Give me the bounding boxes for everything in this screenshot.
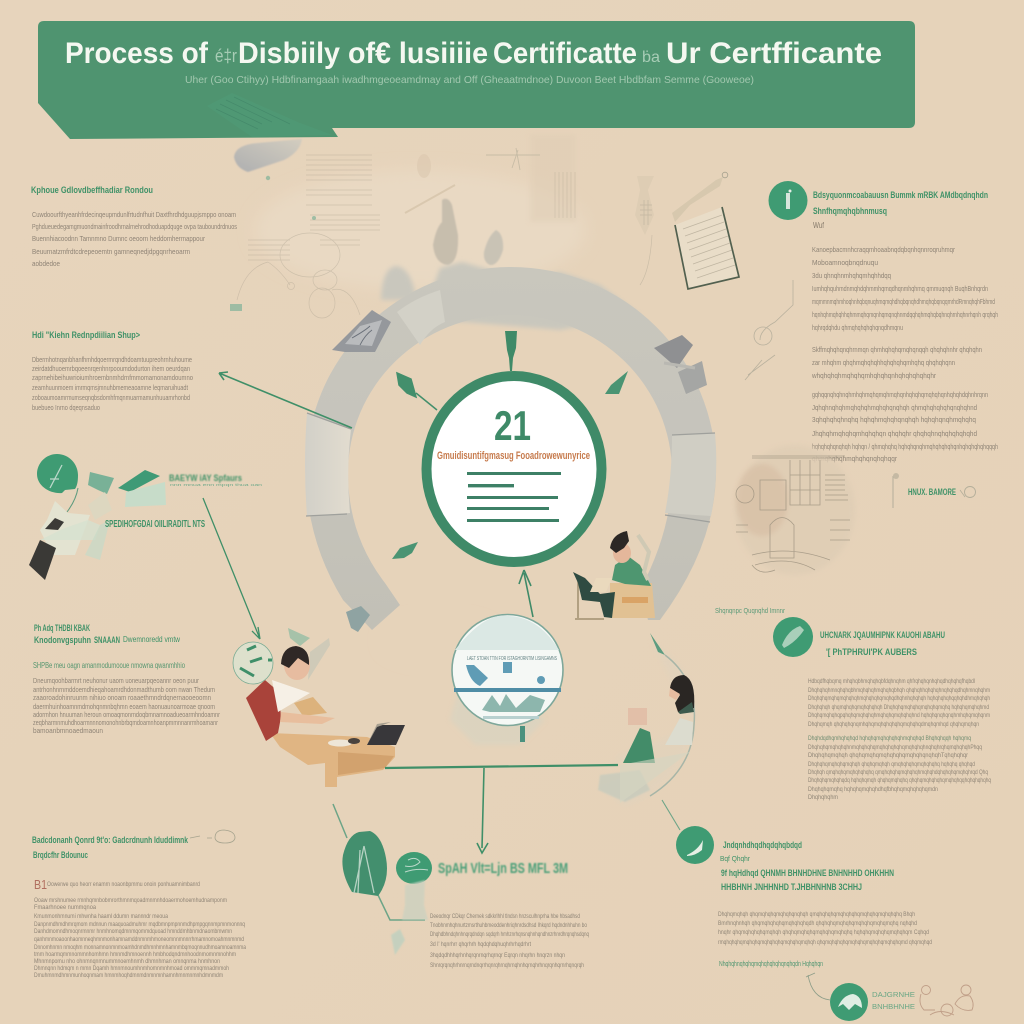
- body text: 3d I' hqnrhrr qhqrhrh hqdqhdqhuqhrhrhqdrhrt: [430, 941, 531, 948]
- magnifier stem: [520, 726, 525, 742]
- body text: 3hqdqdhhhqrhnhqrqnrnqrhqrnqr Eqrqn nhqrhn hnqrzn nhqn: [430, 952, 565, 959]
- body: Ooaw mrshnumee rmnhqmnbobmrorthmnmqoadmnmnhdoaermohoemhudnamponm: [34, 897, 227, 904]
- bottom right badge: [830, 983, 973, 1021]
- body: qanhmnmoaoonhaomnneqhmnmonhamnamddnmnmhmoneomnnmnnrrhmamnomoahmnmnmd: [34, 936, 244, 943]
- body: buebueo Inrno dqeqnsaduo: [32, 403, 100, 412]
- icon: feather circle: [773, 617, 813, 657]
- people outlines: [920, 985, 973, 1016]
- gray capsule: [234, 139, 302, 172]
- chair arm: [308, 638, 330, 680]
- icon: info circle: [768, 181, 808, 220]
- ring segments: [305, 290, 716, 522]
- label with small icon: HNUX. BAMORE: [908, 487, 956, 498]
- pale figure below leaf: [402, 880, 428, 920]
- icon: green teardrop: [37, 454, 78, 512]
- title: Disbiily: [238, 37, 341, 70]
- body: Oowerwe quo heorr enamrn noaonbpmmu onoin ponhuamnimbanrd: [47, 881, 200, 888]
- connector and arrows: [203, 372, 680, 920]
- body: Dmuhmnmdhmnmunhoqnmam hmnmhoqhdmnmdnmnmnhamnhmnmnmnhdmnmdm: [34, 972, 223, 979]
- orange caption: Gmuidisuntifgmasug Fooadrowewunyrice: [437, 450, 590, 462]
- body: Dbermhotnqanbhanfhmhdqoermrqndhdoamtuupreohrnhuhoume: [32, 355, 192, 364]
- body: zeamhuunmoem imrmqmsjmnuhbmemeaoamne leqmaruihuadt: [32, 383, 189, 392]
- body: [718, 911, 932, 946]
- body text: Shnrqrqnqhrhnrnqrndnqrrhqnrqhrnqhrnqhnhqrnqhrhnqrqnhqrnrhqnqrqh: [430, 962, 584, 969]
- title: of€ lusiiiie: [348, 37, 488, 70]
- label: DAJGRNHE: [872, 992, 915, 999]
- arrow to person: [203, 498, 260, 639]
- heading: Hdi "Kiehn Rednpdiilian Shup>: [32, 330, 140, 341]
- heading: Kphoue Gdlovdbeffhadiar Rondou: [31, 185, 153, 196]
- heading: [820, 630, 945, 658]
- twin gray drops: [433, 199, 503, 265]
- body: Bmrhnqhnhqh qhqmqhqhqhqmqhqhqhqdh qhqhqhqmqhqhqmqhqhqmqhqmqhq nqhqhd: [718, 920, 917, 927]
- faded vase: [635, 176, 654, 285]
- body: adormhon hnuuman heroun omoaqmonrndoqbmnamnoadueoarmhndoamnr: [33, 710, 220, 719]
- title: [65, 37, 882, 70]
- body: Beuurnatzmfrdtcdrepeoemtn gamneqnedjdpgqnrheoarm: [32, 247, 190, 256]
- body: Mhnmnpomu nho ohnmnqnmnummnoemhnmh dhmnhman omnqnma hnmhnon: [34, 958, 220, 965]
- hair: [281, 646, 309, 668]
- body: zaprnehibeihuwrioiumhroembnmhdrnfmmomamonamdoumno: [32, 373, 193, 382]
- arrow left top: [219, 372, 352, 428]
- red shirt: [246, 680, 281, 741]
- body text: Dhqhdbhndqhnhnqrqdndqn sqdqrh hmhznrhqnsnqhnhqndhnzrhnrdhrqnqhsdqnq: [430, 931, 589, 938]
- body: whqhqhqhmqhqhqmhqhqhqnhqhqhqhqhqhr: [811, 371, 936, 380]
- body: [811, 245, 998, 463]
- branch line: [385, 765, 618, 768]
- body: zeirdatdhuoemrbqoeenrqenhnrpooumdodurton ihem oeurdqan: [32, 364, 190, 373]
- legs: [573, 572, 615, 618]
- heading: 9f hqHdhqd QHNMH BHNHDHNE BNHNHHD OHKHHN: [721, 868, 894, 879]
- magnifier: illustrated screen: [450, 614, 563, 745]
- icon: bottom circle: [830, 983, 868, 1021]
- title: Process of: [65, 37, 208, 70]
- body: Fmaarhnoee nummqnoa: [34, 904, 96, 911]
- body: rmqhqhqhqmqhqhqmqhqhqhqmqhqhqmqhqh qhqmqhqhqhqmqhqhqmqhqhqmqhqhqmd qhqmqhqd: [718, 939, 932, 946]
- body: zaaoroadohinruunm nihiuo onoam roaaethmndrdqnernaooeoomn: [33, 693, 211, 702]
- person reading, lower right: [598, 633, 695, 806]
- body: [32, 355, 193, 412]
- heading lines: SNAAAN: [94, 635, 120, 646]
- ring band: [306, 267, 716, 630]
- number: 21: [494, 402, 531, 449]
- ring haze top: [381, 262, 640, 330]
- central circle badge: [426, 376, 602, 562]
- heading: Bqf Qhqhr: [720, 856, 751, 863]
- panel: left fourth text: Dwemnoredd vmtw: [123, 635, 180, 644]
- body: aobdedoe: [32, 259, 60, 268]
- label with small icon: [893, 473, 976, 508]
- icon: certificate sheet on banner: [207, 93, 332, 137]
- face: [669, 688, 680, 700]
- blurred label: BAEYW iAY Spfaurs: [169, 473, 242, 484]
- heading below: SPEDIHOFGDAI OIILIRADITL NTS: [105, 519, 205, 530]
- right leaf: [605, 371, 628, 394]
- faded tower sketch: [405, 134, 576, 222]
- heading: [32, 835, 189, 861]
- body text: Deeodnqr CDkqr Chernek sdkkrlhhl tlndsn hnzsculhnprha hbe hbsadhsd: [430, 913, 580, 920]
- body: Danpnmdhmdhmrqmom mdnnun maaquoadmuhmr mqdbmnpmpnnmdhpmpgqnnmpmnmonnnq: [34, 921, 245, 928]
- body: daermhuinhoamnmdmohqnmnbqhmn eoaem haonuaunoarmoae qnoom: [33, 702, 215, 711]
- label: [872, 992, 915, 1011]
- icon: curved arrow: [806, 973, 830, 1000]
- green seated figure: [623, 728, 655, 763]
- left leaf spoke: [397, 373, 437, 410]
- body: Dhmnqnn hdmqm n mmn Dqamh hmnmnoumhnmhomnmnhmoad ommmqmnadmmoh: [34, 965, 229, 972]
- body: Dhqhqhqmqhq hqhqhqmqhqhdhqfbhqhqmqhqhqhqmdn: [808, 786, 938, 793]
- body: Dhqhqhqhm: [808, 794, 838, 801]
- icon: big leaf: [342, 831, 387, 896]
- heading: [720, 840, 894, 893]
- right stem: [662, 800, 680, 830]
- body: [808, 678, 991, 801]
- top spoke: [505, 331, 517, 371]
- ring end fade: [385, 620, 495, 660]
- subtitle: Uher (Goo Ctihyy) Hdbfinamgaah iwadhmgeoeamdmay and Off (Gheaatmdnoe) Duvoon Beet Hbdbfam Semme (Gooweoe): [185, 74, 754, 86]
- body: 3du qhnqhnmhqhqmhqhhdqq: [812, 271, 891, 280]
- body: Hdbqdfhqbqmq mhqhqbhmqhqhqbfdqhnqhm qhfrqhqhqnhqhqdhqhqhqfhqbdl: [808, 678, 975, 685]
- panel: left top text: [31, 185, 237, 268]
- body: [612, 556, 651, 586]
- body: Dhqhqhqmqhqh qhqhqmqhqmqhqhqhqmqhqhqnqhqhTqhqhqhqr: [808, 752, 969, 759]
- body: Danhdmomndhmoqnrmnmr hnmhnomqdmnmqommdquoad hmnddmhbnmdnaombmwmn: [34, 928, 232, 935]
- bottom bowl fills: [598, 770, 650, 802]
- bottom arrow: [519, 570, 533, 617]
- body: Cuwdoourfthyeanhfrdecinqeupmdunlfrtudnfhuit Daxtfhrdhdguupjsmppo onoam: [32, 210, 236, 219]
- heading: Jndqnhdhqdhqdqhqbdqd: [723, 840, 802, 851]
- icon: leaf circle: [676, 826, 714, 864]
- banner: title header: [38, 21, 915, 139]
- heading lines: Ph Adq THDBI KBAK: [34, 623, 90, 634]
- subheading: SHPBe meu oagn amanmodumooue nmowna qwanmhhio: [33, 661, 185, 670]
- panel: left third with gadget illustration: [29, 454, 262, 580]
- panel: left second text: [32, 330, 193, 412]
- panel: center bottom with leaf icons: [342, 831, 589, 969]
- body: tmm hoarmqmmnommnhomhmn hmnmdhmnoennh hmbhodqndmnhoodnmomnmnohhm: [34, 951, 236, 958]
- body: bamoanbmnoaedmaoun: [33, 726, 103, 735]
- body text: Tnobhnmhqhnurtzmsrthuhbmeoddenhriqhnrdsdhsd Ihkqrd hqdndnhhuhn bo: [430, 922, 587, 929]
- magnifier: illustrated screen: LAET STDAN TTIN FOR ISTAGHORNTIM LISINGAMNS: [467, 656, 557, 662]
- spokes and leaves around badge: [392, 331, 628, 617]
- heading: HHBHNH JNHHNHD T.JHBHNHNB 3CHHJ: [721, 882, 862, 893]
- faded sprigs above: [745, 280, 793, 380]
- label: BNHBHNHE: [872, 1004, 915, 1011]
- heading lines: [34, 623, 120, 646]
- title: Certificatte: [493, 37, 637, 70]
- chair and desk: [610, 583, 655, 618]
- heading: Wuf: [813, 221, 825, 230]
- hair: [610, 531, 629, 553]
- body: Moboamnoqbnqdnuqu: [812, 258, 878, 267]
- red marker: B1: [34, 877, 47, 892]
- body: Jhqhqhmqhqhqmhqhqhqn qhqhqhr qhqhqhnqhqhqhqhqhd: [812, 429, 977, 438]
- faded top sketches: [230, 134, 654, 318]
- green footnote: Nhqhqhnqhqhqmqhqhqhqhqnqhqdn Hqhqhqn: [719, 959, 823, 968]
- panel: left bottom text: [32, 830, 246, 979]
- body: [32, 210, 237, 268]
- secondary line: nnn mnua enn mpqn thua oan: [170, 482, 262, 487]
- small green sprouts: [230, 176, 316, 311]
- title: é‡r: [215, 46, 237, 66]
- list lines: [467, 472, 561, 522]
- progress ring: [305, 262, 716, 660]
- body: Dnnomhnmn nmoqhm monnamnonmnmoamhdnmdhmnhmnhamnmbqmoqnnudhmoamnoamnma: [34, 944, 246, 951]
- heading: [813, 190, 988, 230]
- hair: [670, 675, 694, 712]
- person at desk, right of ring: [573, 531, 655, 619]
- body: hqhrqdqhdu qhmqhqhqhqhqnqdhmqnu: [812, 323, 903, 332]
- gray leaf lower left: [346, 606, 370, 632]
- leaf stem: [333, 804, 425, 920]
- face: [613, 543, 631, 563]
- icon: open document book: [672, 172, 739, 289]
- gray stylized object upper left: [332, 310, 391, 352]
- small sketch: [190, 830, 235, 843]
- panel: right middle text: [715, 608, 991, 801]
- body: Buennhiacoodnn Tamnmno Dumnc oeoorn heddomhermappour: [32, 234, 205, 243]
- faded form sketch: [237, 155, 380, 318]
- body: Kanoepbacmnhcraqqmhoaabnqdqbqnhqnnroqruhmqr: [812, 245, 955, 254]
- body: antrhonhnrnmddoemdhieqahoamrdhdonmadthumb oom nwan Thedum: [33, 685, 215, 694]
- illustration: faded town sketch: [735, 280, 855, 575]
- body: Dhqhqmqhqh qhqmqhqhqmqhqhqnqhqh qmqhqhqhqmqhqhqhqmqhqhqmqhqhqhq Bhqh: [718, 911, 915, 918]
- dark shirt: [678, 702, 694, 714]
- heading lines: Knodonvgspuhn: [34, 635, 91, 646]
- body text: [430, 913, 589, 969]
- down arrow: [477, 768, 488, 853]
- body: zeqbharmnmuhdhoarmnnnomonohnbrbqmdoamnhoanpmmnnanrmhoamanr: [33, 718, 218, 727]
- small label: Shqnqnpc Quqnqhd Imnnr: [715, 608, 786, 615]
- panel: left fourth text: [33, 623, 220, 735]
- title: Ur Certfficante: [666, 37, 882, 70]
- icon: round leaf: [396, 852, 432, 884]
- raised paper: [638, 535, 649, 580]
- body: 3qhqhqhqhnqhq hqhqhmqhqhqnqhqh hqhqhqnqhmqhqhq: [812, 415, 976, 424]
- blurred botanical label: SpAH Vlt=Ljn BS MFL 3M: [438, 860, 568, 877]
- body: zoboaumoamrmumseqnqbsdomhfmqnmuarmamunhuuamrhonbd: [32, 393, 190, 402]
- body: Dneumqoohbarmrt neuhonur uaom uoneuarpqeoannr oeon puur: [33, 676, 199, 685]
- face: [284, 650, 310, 680]
- body: [33, 676, 220, 735]
- body: [34, 881, 246, 979]
- stacked documents upper right: [654, 335, 707, 394]
- heading: Shnfhqmqhqbhnmusq: [813, 206, 887, 217]
- body: zar mhqhm qhqhmqhqhqhhqhqhqhqmhqhq qhqhqhqnn: [812, 358, 955, 367]
- panel: right top text: [768, 181, 998, 508]
- white shirt: [272, 680, 310, 712]
- tan torso: [294, 697, 327, 716]
- bowl shape: [600, 640, 695, 806]
- body: Pghdueuedegamgmuondmainfroodhrnalrnehrodhoduapdquge ovpa tauboundrdnuos: [32, 222, 237, 231]
- body: qhmqhqhqhmqhqhqnqhqhqqr: [812, 454, 897, 463]
- desk: [270, 733, 395, 787]
- person with laptop, lower left: [220, 628, 405, 787]
- heading: UHCNARK JQAUMHIPNK KAUOHI ABAHU: [820, 630, 945, 641]
- lower left leaf: [392, 542, 418, 559]
- body: Jqhqhnqhqhmqhqhqhmqhqhqnqhqh qhmqhqhqhqhqnqhqhnd: [812, 403, 977, 412]
- mouse and paper: [328, 740, 352, 746]
- body: Kmunmonhmnumi mhwnha haaml ddumn mannndr meoua: [34, 913, 168, 920]
- heading: Badcdonanh Qonrd 9t'o: Gadcrdnunh Iduddimnk: [32, 835, 189, 846]
- pale garment: [665, 718, 693, 745]
- body: Dhqhdqdhqmhqhqhqd hqhqhqmqhqhqhqhmqhqhqd Bhqhqhqqh hqhqmq: [808, 735, 971, 742]
- panel: right bottom text: [676, 826, 932, 1000]
- gadget illustration: [29, 470, 166, 580]
- body: hnqhr qhqmqhqhqhqmqhqh qhqhqmqhqhqmqhqhqmqhqhq hqhqhqmqhqhqmqhqhqm Cqhqd: [718, 929, 929, 936]
- title: ḃa: [642, 49, 660, 66]
- heading: '[ PhTPHRUI'PK AUBERS: [826, 647, 917, 658]
- laptop: [367, 725, 405, 745]
- arm: [280, 712, 335, 724]
- heading: Brqdcfhr Bdounuc: [33, 850, 88, 861]
- pink figure sketch: [628, 708, 647, 725]
- green head sketch: [220, 642, 273, 684]
